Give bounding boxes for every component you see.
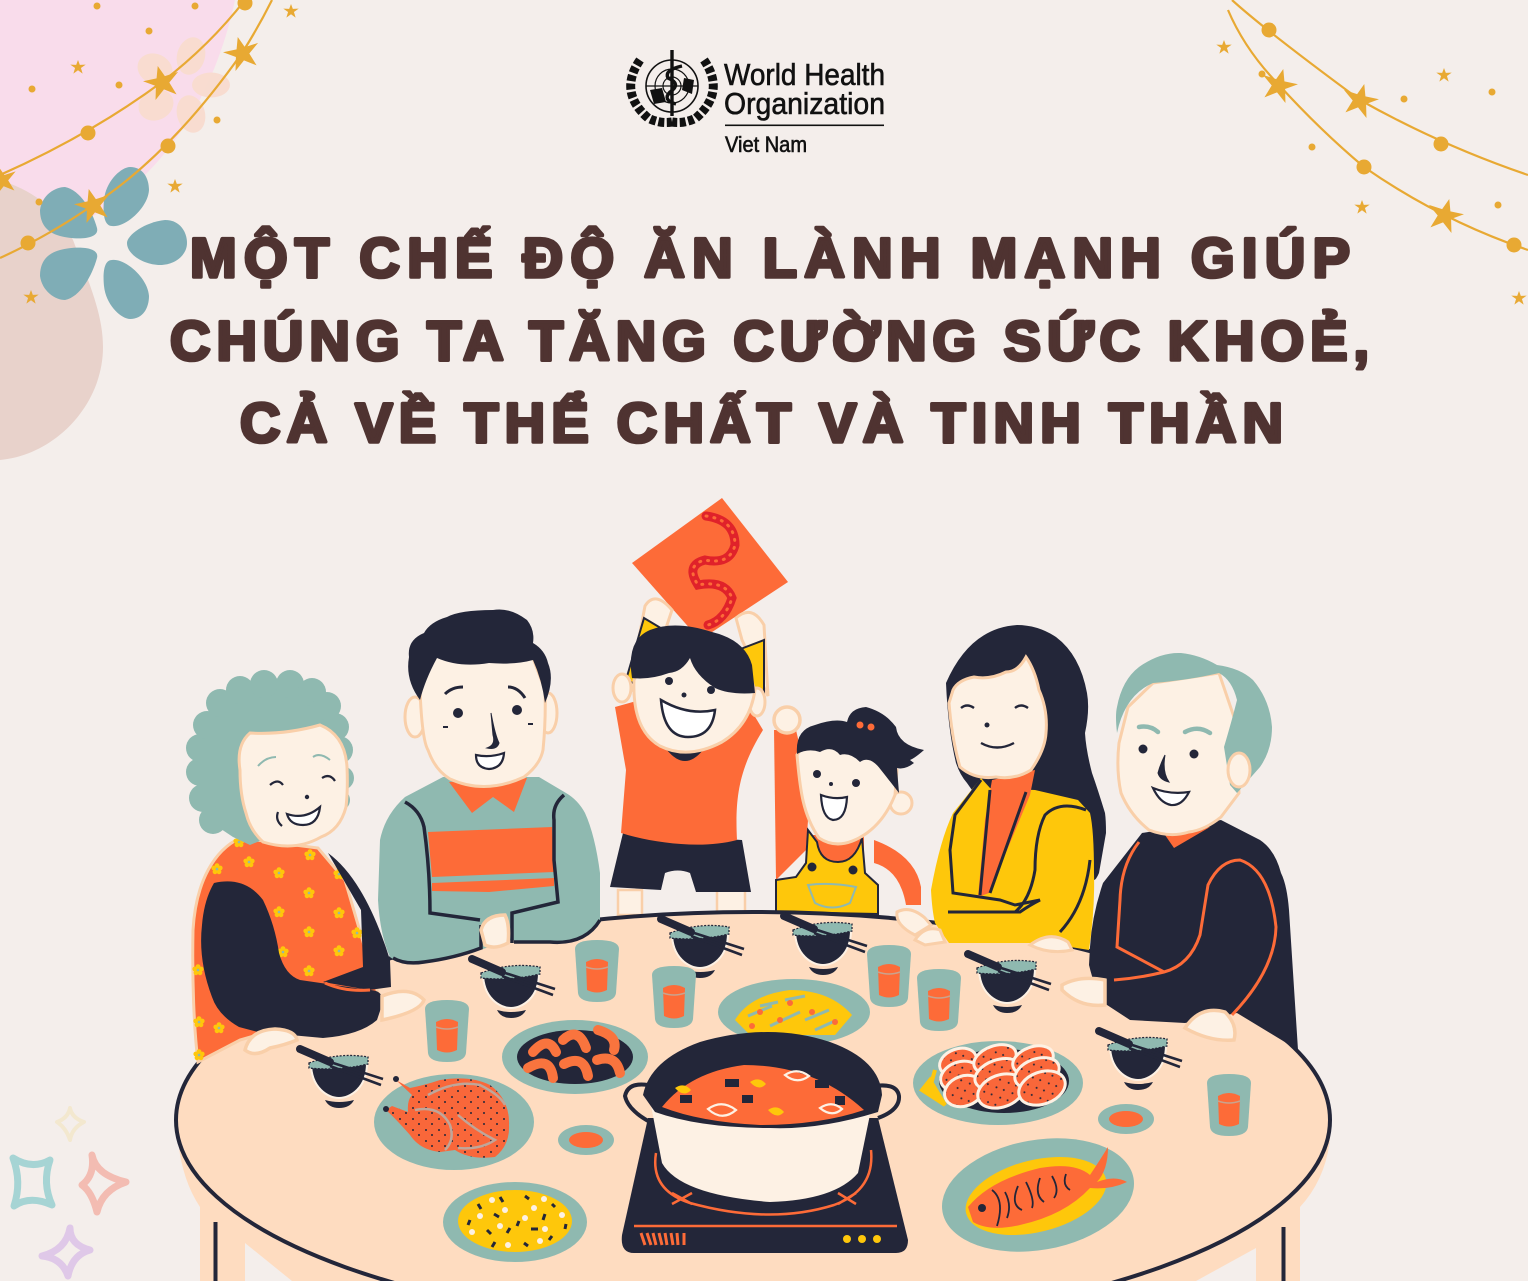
person: mother xyxy=(897,625,1106,952)
dish: stir-fried noodles xyxy=(718,979,870,1045)
dish: roast chicken xyxy=(374,1074,534,1170)
flower pattern xyxy=(192,836,363,1060)
decoration: left garlands xyxy=(0,0,299,304)
pot body xyxy=(650,1100,873,1202)
table xyxy=(176,912,1330,1281)
person: grandfather xyxy=(1062,653,1298,1050)
logo: wordmark: Organization xyxy=(724,86,885,121)
person: grandmother xyxy=(186,670,424,1062)
person: boy holding snake card xyxy=(610,498,788,915)
hotpot on induction stove xyxy=(622,1032,908,1253)
logo: wordmark: Viet Nam xyxy=(725,132,807,157)
stove xyxy=(622,1118,908,1253)
dish: yellow fried rice xyxy=(443,1182,587,1262)
dish: sauce right xyxy=(1098,1104,1154,1134)
person: father xyxy=(378,609,600,963)
pot rim and soup xyxy=(643,1032,882,1128)
dish: shrimp xyxy=(502,1020,648,1094)
decoration: right garlands xyxy=(1216,0,1528,305)
cups xyxy=(425,940,1251,1136)
card with snake xyxy=(632,498,788,640)
decoration: pale flower xyxy=(132,34,230,136)
dish: sliced sausage xyxy=(913,1039,1083,1125)
decoration: pink and beige corner blobs xyxy=(0,0,235,460)
dish: whole fish xyxy=(933,1124,1143,1266)
curly hair xyxy=(186,670,354,845)
logo: WHO emblem xyxy=(631,50,713,122)
decoration: teal flower xyxy=(40,167,187,319)
title: CẢ VỀ THỂ CHẤT VÀ TINH THẦN xyxy=(240,391,1283,454)
decoration: sparkles xyxy=(13,1108,126,1276)
logo: wordmark xyxy=(724,57,885,157)
title: CHÚNG TA TĂNG CƯỜNG SỨC KHOẺ, xyxy=(170,309,1369,372)
title: MỘT CHẾ ĐỘ ĂN LÀNH MẠNH GIÚP xyxy=(190,226,1350,289)
logo: wordmark: World Health xyxy=(724,57,885,92)
dish: sauce left xyxy=(558,1125,614,1155)
title xyxy=(170,226,1369,454)
bowls with chopsticks xyxy=(300,916,1182,1108)
person: girl xyxy=(774,707,924,914)
